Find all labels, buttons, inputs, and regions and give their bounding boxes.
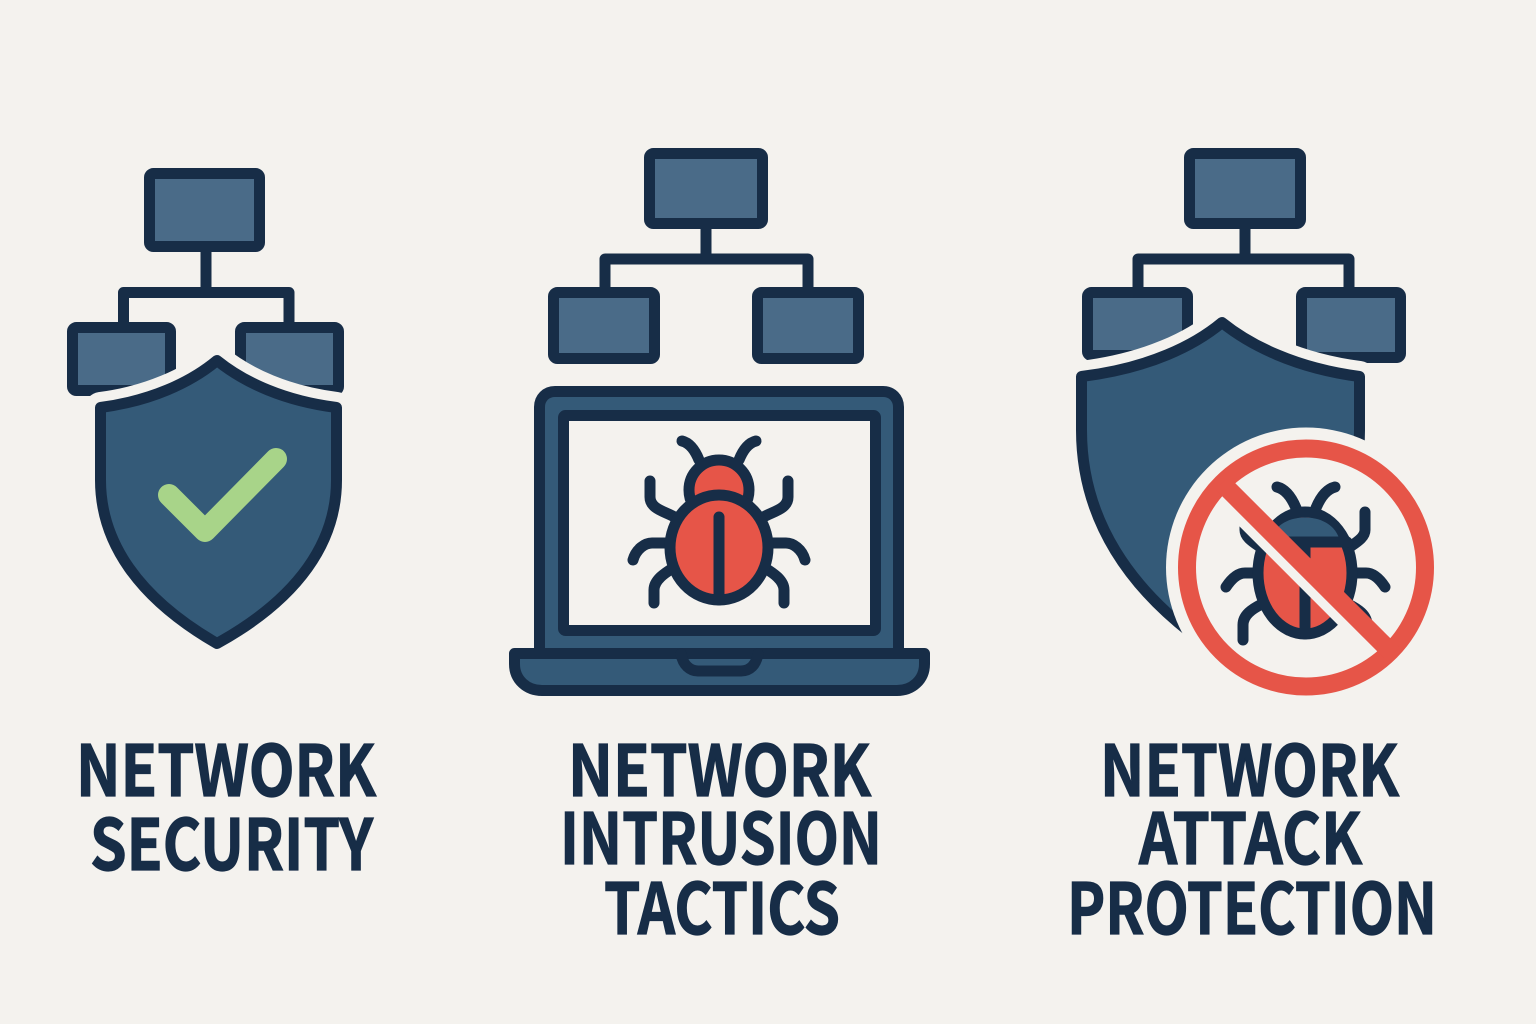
icon: no-bug prohibition sign <box>1166 428 1446 708</box>
panel: network attack protection <box>1067 154 1446 955</box>
heading: network attack protection: NETWORK <box>1100 716 1400 817</box>
icon: network hierarchy <box>72 174 338 390</box>
heading: network attack protection: ATTACK <box>1138 784 1363 885</box>
heading: network intrusion tactics: TACTICS <box>604 854 840 955</box>
icon: green check mark <box>169 459 276 531</box>
icon: network hierarchy <box>1088 154 1400 358</box>
heading: network intrusion tactics: INTRUSION <box>560 784 882 885</box>
heading: network security: SECURITY <box>90 790 374 891</box>
icon: laptop <box>514 392 924 690</box>
heading: network security: NETWORK <box>76 716 377 817</box>
heading: network attack protection: PROTECTION <box>1067 854 1437 955</box>
heading: network attack protection <box>1067 716 1437 955</box>
icon: shield <box>100 360 336 644</box>
icon: red bug <box>633 441 805 603</box>
panel: network intrusion tactics <box>514 154 924 955</box>
icon: network hierarchy <box>554 154 858 358</box>
heading: network intrusion tactics: NETWORK <box>568 716 872 817</box>
icon: shield <box>1082 322 1360 655</box>
heading: network security <box>76 716 377 891</box>
heading: network intrusion tactics <box>560 716 882 955</box>
panel: network security <box>72 174 377 891</box>
